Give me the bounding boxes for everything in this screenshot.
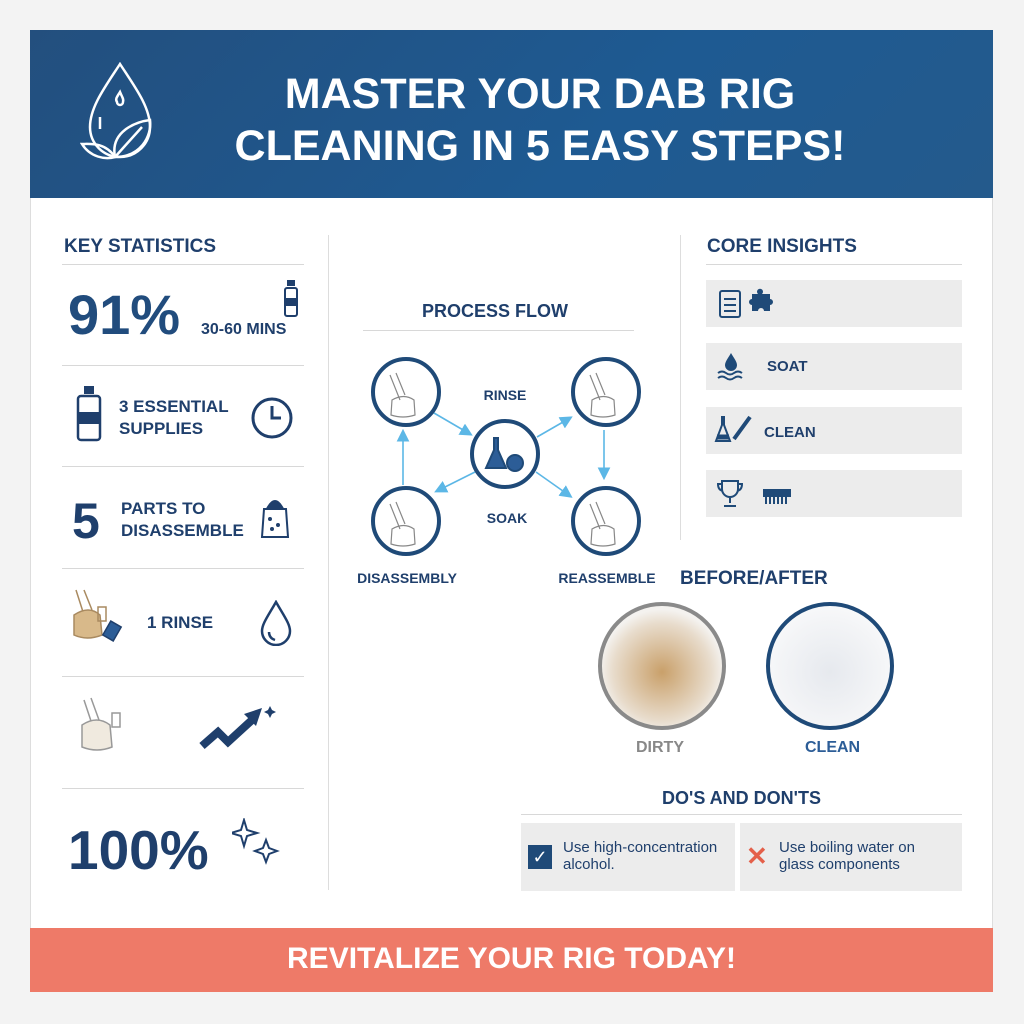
- stat: 3 essential supplies: 3 ESSENTIAL: [119, 397, 229, 416]
- dont box: ✕: [746, 841, 768, 871]
- stat: 1 rinse: 1 RINSE: [147, 613, 213, 632]
- flow chart: DISASSEMBLY: [357, 570, 458, 586]
- title: MASTER YOUR DAB RIG: [285, 70, 795, 118]
- icon: clean rig: [81, 698, 121, 751]
- panel: key statistics: PARTS TO: [121, 499, 205, 518]
- dont box: [740, 823, 962, 891]
- heading: core insights: CORE INSIGHTS: [707, 236, 857, 257]
- heading: before/after: BEFORE/AFTER: [680, 568, 828, 589]
- panel: key statistics: [62, 236, 304, 881]
- insight row 3: clean: CLEAN: [764, 424, 816, 441]
- flow chart: REASSEMBLE: [558, 570, 656, 586]
- divider left: [328, 235, 329, 890]
- title: CLEANING IN 5 EASY STEPS!: [235, 122, 845, 170]
- heading: process flow: PROCESS FLOW: [422, 301, 568, 321]
- footer text: REVITALIZE YOUR RIG TODAY!: [287, 942, 736, 975]
- icon: trend arrow: [200, 706, 276, 749]
- panel: process flow: [357, 301, 656, 586]
- flow chart: [357, 357, 656, 586]
- image: clean rig: [766, 602, 894, 730]
- insight row 1: [706, 280, 962, 327]
- icon: drop: [260, 600, 292, 646]
- insight row 2: soat: [706, 343, 962, 390]
- panel: core insights: [706, 236, 962, 517]
- stat: 91%: 91%: [68, 283, 180, 346]
- dont box: glass components: [779, 856, 900, 873]
- heading: dos and donts: DO'S AND DON'TS: [662, 788, 821, 808]
- panel: key statistics: DISASSEMBLE: [121, 521, 244, 540]
- label: clean: CLEAN: [805, 739, 860, 756]
- do box: [521, 823, 735, 891]
- icon: shaker: [260, 500, 290, 538]
- flow chart: RINSE: [484, 387, 526, 403]
- stat: 3 essential supplies: [119, 397, 229, 438]
- footer banner: [30, 928, 993, 992]
- do box: ✓: [532, 847, 548, 867]
- stat: 3 essential supplies: SUPPLIES: [119, 419, 203, 438]
- heading: key statistics: KEY STATISTICS: [64, 236, 216, 257]
- insight row 2: soat: SOAT: [767, 358, 808, 375]
- icon: sparkles: [232, 818, 280, 865]
- flow chart: SOAK: [487, 510, 527, 526]
- do box: Use high-concentration: [563, 839, 717, 856]
- icon: clock: [252, 398, 292, 438]
- icon: dirty rig: [73, 590, 122, 642]
- icon: bottle: [284, 280, 298, 317]
- stat: 100%: 100%: [68, 819, 209, 881]
- dont box: Use boiling water on: [779, 839, 915, 856]
- insight row 3: clean: [706, 407, 962, 454]
- insight row 4: [706, 470, 962, 517]
- icon: supplies bottle: [76, 386, 102, 442]
- image: dirty rig: [598, 602, 726, 730]
- stat: 5 parts: 5: [72, 493, 100, 549]
- header banner: [30, 30, 993, 198]
- icon: water drop with leaves: [80, 62, 152, 160]
- panel: before/after: [598, 568, 894, 756]
- divider right: [680, 235, 681, 540]
- do box: alcohol.: [563, 856, 615, 873]
- panel: dos and donts: [521, 788, 962, 891]
- stat: 30-60 mins: 30-60 MINS: [201, 321, 286, 338]
- title: [235, 70, 845, 170]
- label: dirty: DIRTY: [636, 739, 684, 756]
